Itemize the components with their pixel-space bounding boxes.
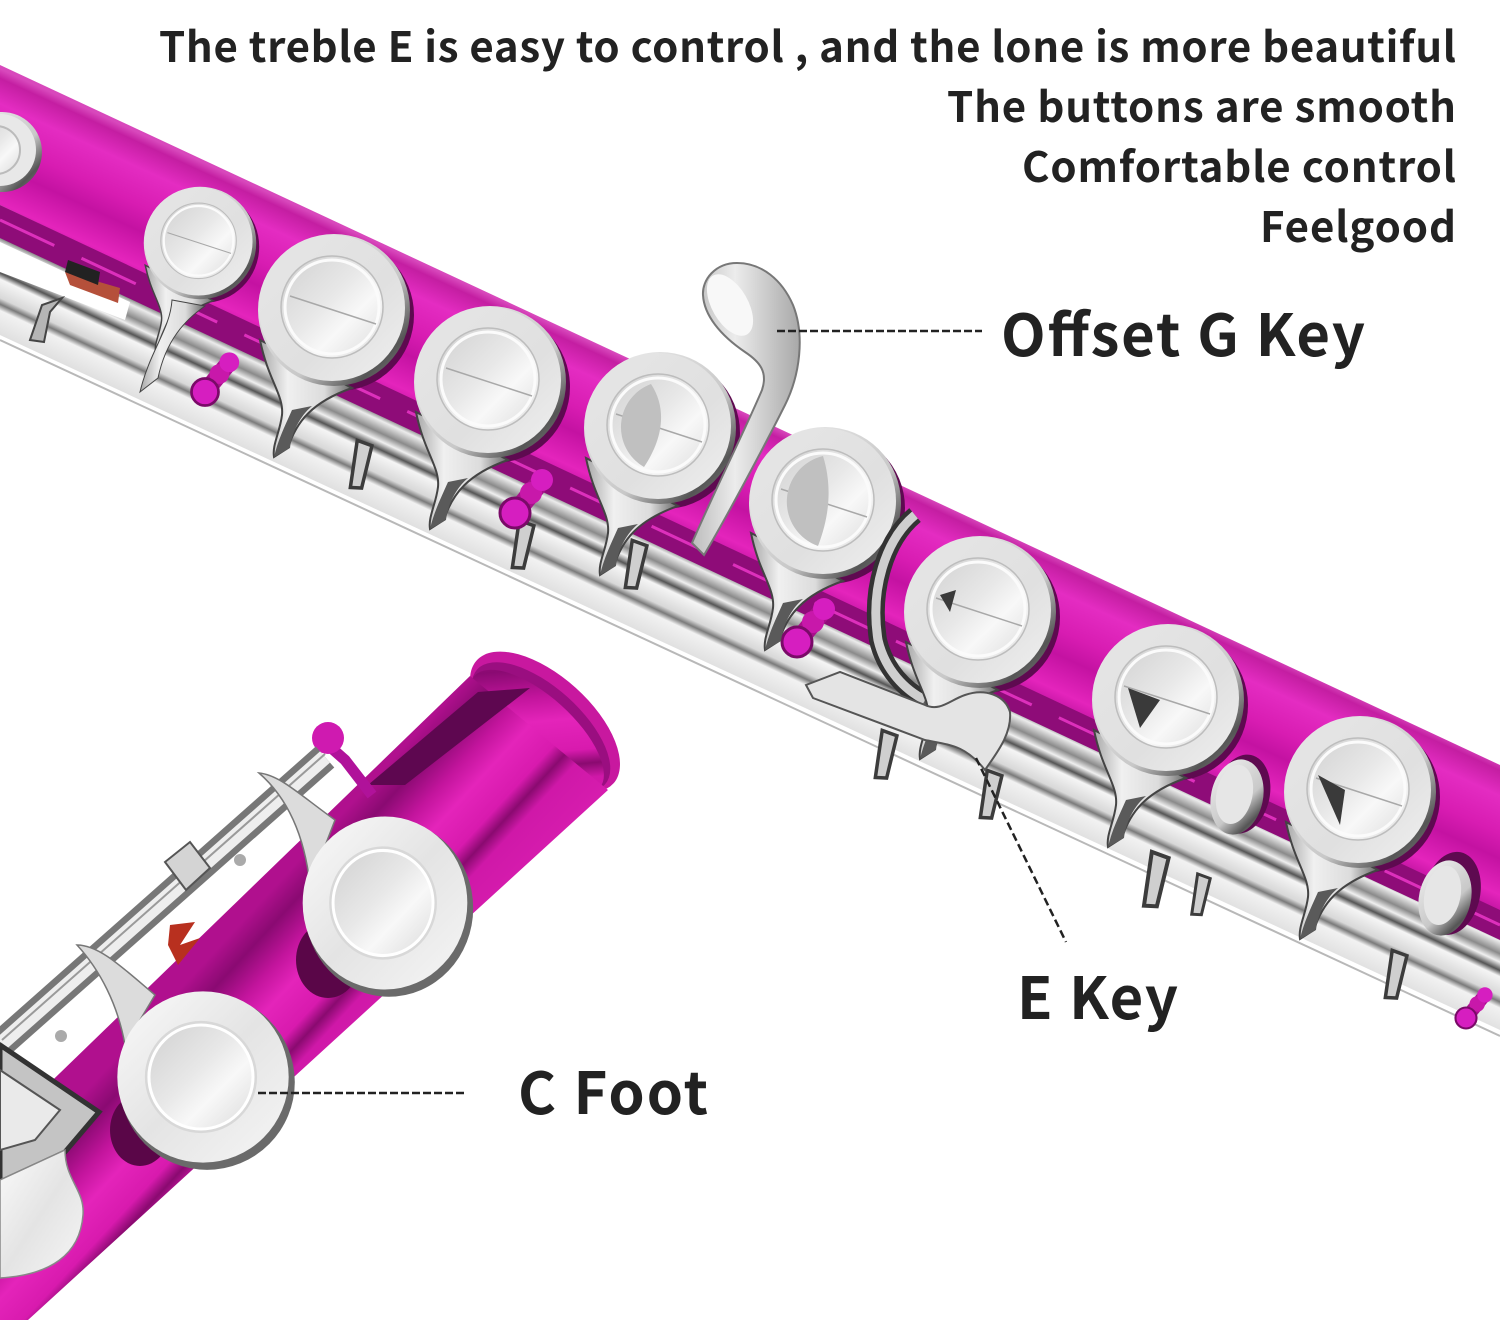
callout: C Foot: C Foot xyxy=(518,1047,708,1131)
curved lever xyxy=(876,515,925,700)
small screw xyxy=(234,854,246,866)
key 7 xyxy=(1092,624,1248,847)
lower-left paddle xyxy=(0,1150,83,1278)
trill key right xyxy=(1412,846,1488,942)
offset G key xyxy=(692,263,800,555)
foot end rim xyxy=(446,626,644,818)
rod shine line xyxy=(2,754,325,1040)
heading text block: Comfortable control xyxy=(1022,134,1456,195)
key shadow 2 xyxy=(110,1094,170,1166)
heading text block: The buttons are smooth xyxy=(947,74,1456,135)
magenta knobs xyxy=(192,352,1493,1028)
rod posts xyxy=(349,440,1407,1000)
heading text block: Feelgood xyxy=(1260,194,1456,255)
foot key lower xyxy=(117,991,295,1170)
key 2 xyxy=(258,234,414,457)
key arm 1 xyxy=(259,773,335,885)
lower-left lever frame xyxy=(0,1045,99,1182)
rod lower line xyxy=(0,340,1500,1036)
callout: E Key: E Key xyxy=(1017,952,1178,1036)
heading text block: The treble E is easy to control , and the lone is more beautiful xyxy=(159,14,1456,75)
bright strip within mechanism xyxy=(0,220,1500,925)
foot joint xyxy=(0,626,644,1320)
mechanism color xyxy=(168,922,200,965)
heading text block xyxy=(159,14,1456,255)
keys on main flute xyxy=(140,187,1440,939)
callout: E Key xyxy=(976,758,1178,1036)
foot dark band xyxy=(368,688,530,785)
key 4 grey half xyxy=(621,384,661,467)
gap on the left of the rods xyxy=(0,242,130,320)
key shadow 1 xyxy=(296,922,360,998)
key 4 xyxy=(584,352,740,575)
foot rod xyxy=(2,757,325,1043)
foot end rim inner xyxy=(450,649,624,815)
key 5 xyxy=(749,427,905,650)
key 1 xyxy=(144,187,259,352)
foot knob xyxy=(312,722,372,795)
key 3 xyxy=(414,306,570,529)
rod fitting xyxy=(165,842,210,890)
silver rods xyxy=(0,238,1500,1030)
trill key left xyxy=(1204,749,1277,841)
key arm 2 xyxy=(77,945,155,1045)
key 8 xyxy=(1284,716,1440,939)
small screw xyxy=(55,1030,67,1042)
key: partial top-left xyxy=(0,112,42,192)
foot key upper xyxy=(303,816,473,997)
foot end rim groove xyxy=(450,640,632,814)
foot tube xyxy=(0,676,608,1320)
foot rod highlight xyxy=(2,757,325,1043)
key 5 grey half xyxy=(787,456,829,546)
dark reflections xyxy=(940,590,1345,825)
callout: Offset G Key: Offset G Key xyxy=(1001,289,1365,373)
main flute body xyxy=(0,65,1500,1036)
black felt detail xyxy=(65,260,100,285)
pink tube xyxy=(0,65,1500,918)
key 6 xyxy=(904,536,1060,759)
red felt detail xyxy=(65,272,120,303)
lever frame inner xyxy=(0,1070,60,1150)
hinge post xyxy=(30,298,62,342)
dark mechanism strip xyxy=(0,205,1500,945)
E key lever xyxy=(806,672,1010,770)
